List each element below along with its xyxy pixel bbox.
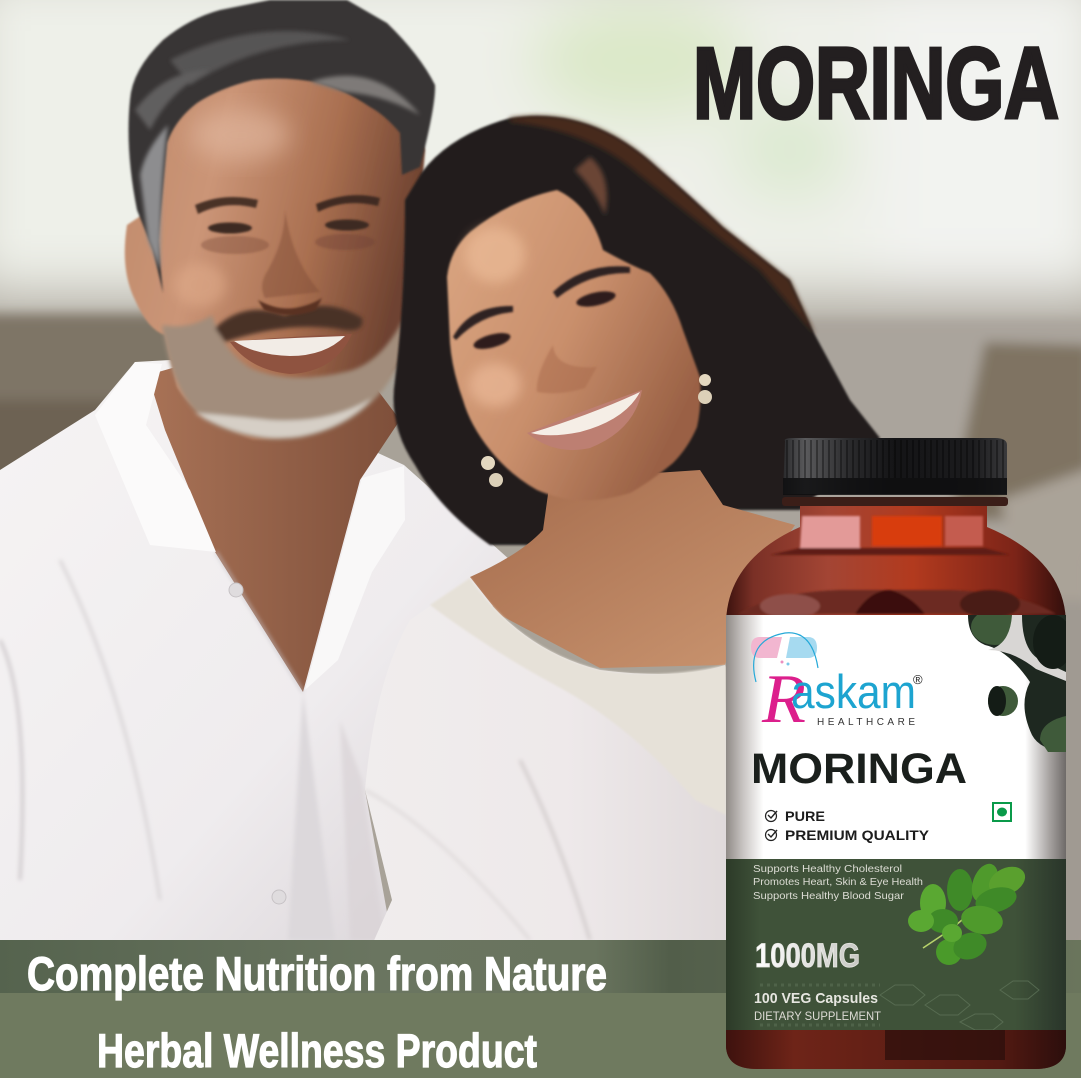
label: benefits list <box>753 863 923 902</box>
label: dietary supplement: DIETARY SUPPLEMENT <box>754 1011 881 1023</box>
headline: complete nutrition: Complete Nutrition from Nature <box>27 947 607 1000</box>
woman: smile <box>527 390 642 450</box>
label: product name: MORINGA <box>751 745 967 793</box>
label: check premium quality: PREMIUM QUALITY <box>785 827 930 843</box>
man: smile <box>230 334 352 374</box>
label: decorative pattern <box>968 615 1066 752</box>
bottle: neck ring <box>782 497 1008 506</box>
man: shirt and body <box>0 360 510 940</box>
bottle: white label <box>726 615 1066 860</box>
icon: moringa leaves <box>908 860 1030 965</box>
woman: lace neckline <box>430 578 726 815</box>
headline: herbal wellness: Herbal Wellness Product <box>97 1024 537 1077</box>
bottle: capsules inside <box>738 590 1056 618</box>
woman: white blouse <box>365 578 730 945</box>
logo: registered mark: ® <box>913 672 923 687</box>
label: benefits list: Supports Healthy Cholesterol <box>753 863 902 875</box>
logo: R: R <box>761 661 806 738</box>
label: green panel <box>726 859 1066 1030</box>
label: check pure: PURE <box>785 808 825 824</box>
label: veg mark <box>993 803 1011 821</box>
woman: hair <box>394 116 880 545</box>
woman: neck and chest <box>470 470 795 668</box>
logo: capsules <box>751 633 818 682</box>
man: shirt folds <box>0 552 385 940</box>
label: benefits list: Promotes Heart, Skin & Eye Health <box>753 876 923 888</box>
label: raskam logo <box>751 633 923 738</box>
bottle: glass body <box>726 505 1066 1069</box>
product bottle <box>726 438 1073 1069</box>
bottle: cap <box>783 438 1007 495</box>
label: capsule count: 100 VEG Capsules <box>754 990 878 1007</box>
man: shirt collar <box>95 362 405 690</box>
woman: brows and eyes <box>453 266 630 393</box>
woman: face <box>447 190 701 500</box>
woman: earrings <box>481 374 712 487</box>
bottom banner <box>0 940 1081 1081</box>
label: dosage: 1000MG <box>755 937 860 975</box>
man: shirt buttons <box>229 583 286 904</box>
man: head <box>125 0 435 440</box>
label: benefits list: Supports Healthy Blood Sugar <box>753 890 905 902</box>
label: hexagon pattern <box>760 981 1039 1030</box>
man: hair <box>129 0 435 293</box>
logo: askam: askam <box>791 665 916 718</box>
logo: healthcare: HEALTHCARE <box>817 717 915 728</box>
man: eyes and brows <box>195 195 380 315</box>
man: neck <box>148 360 400 692</box>
man: beard <box>162 306 404 440</box>
label: check pure <box>766 808 825 824</box>
bottle: neck highlights <box>770 516 1010 555</box>
